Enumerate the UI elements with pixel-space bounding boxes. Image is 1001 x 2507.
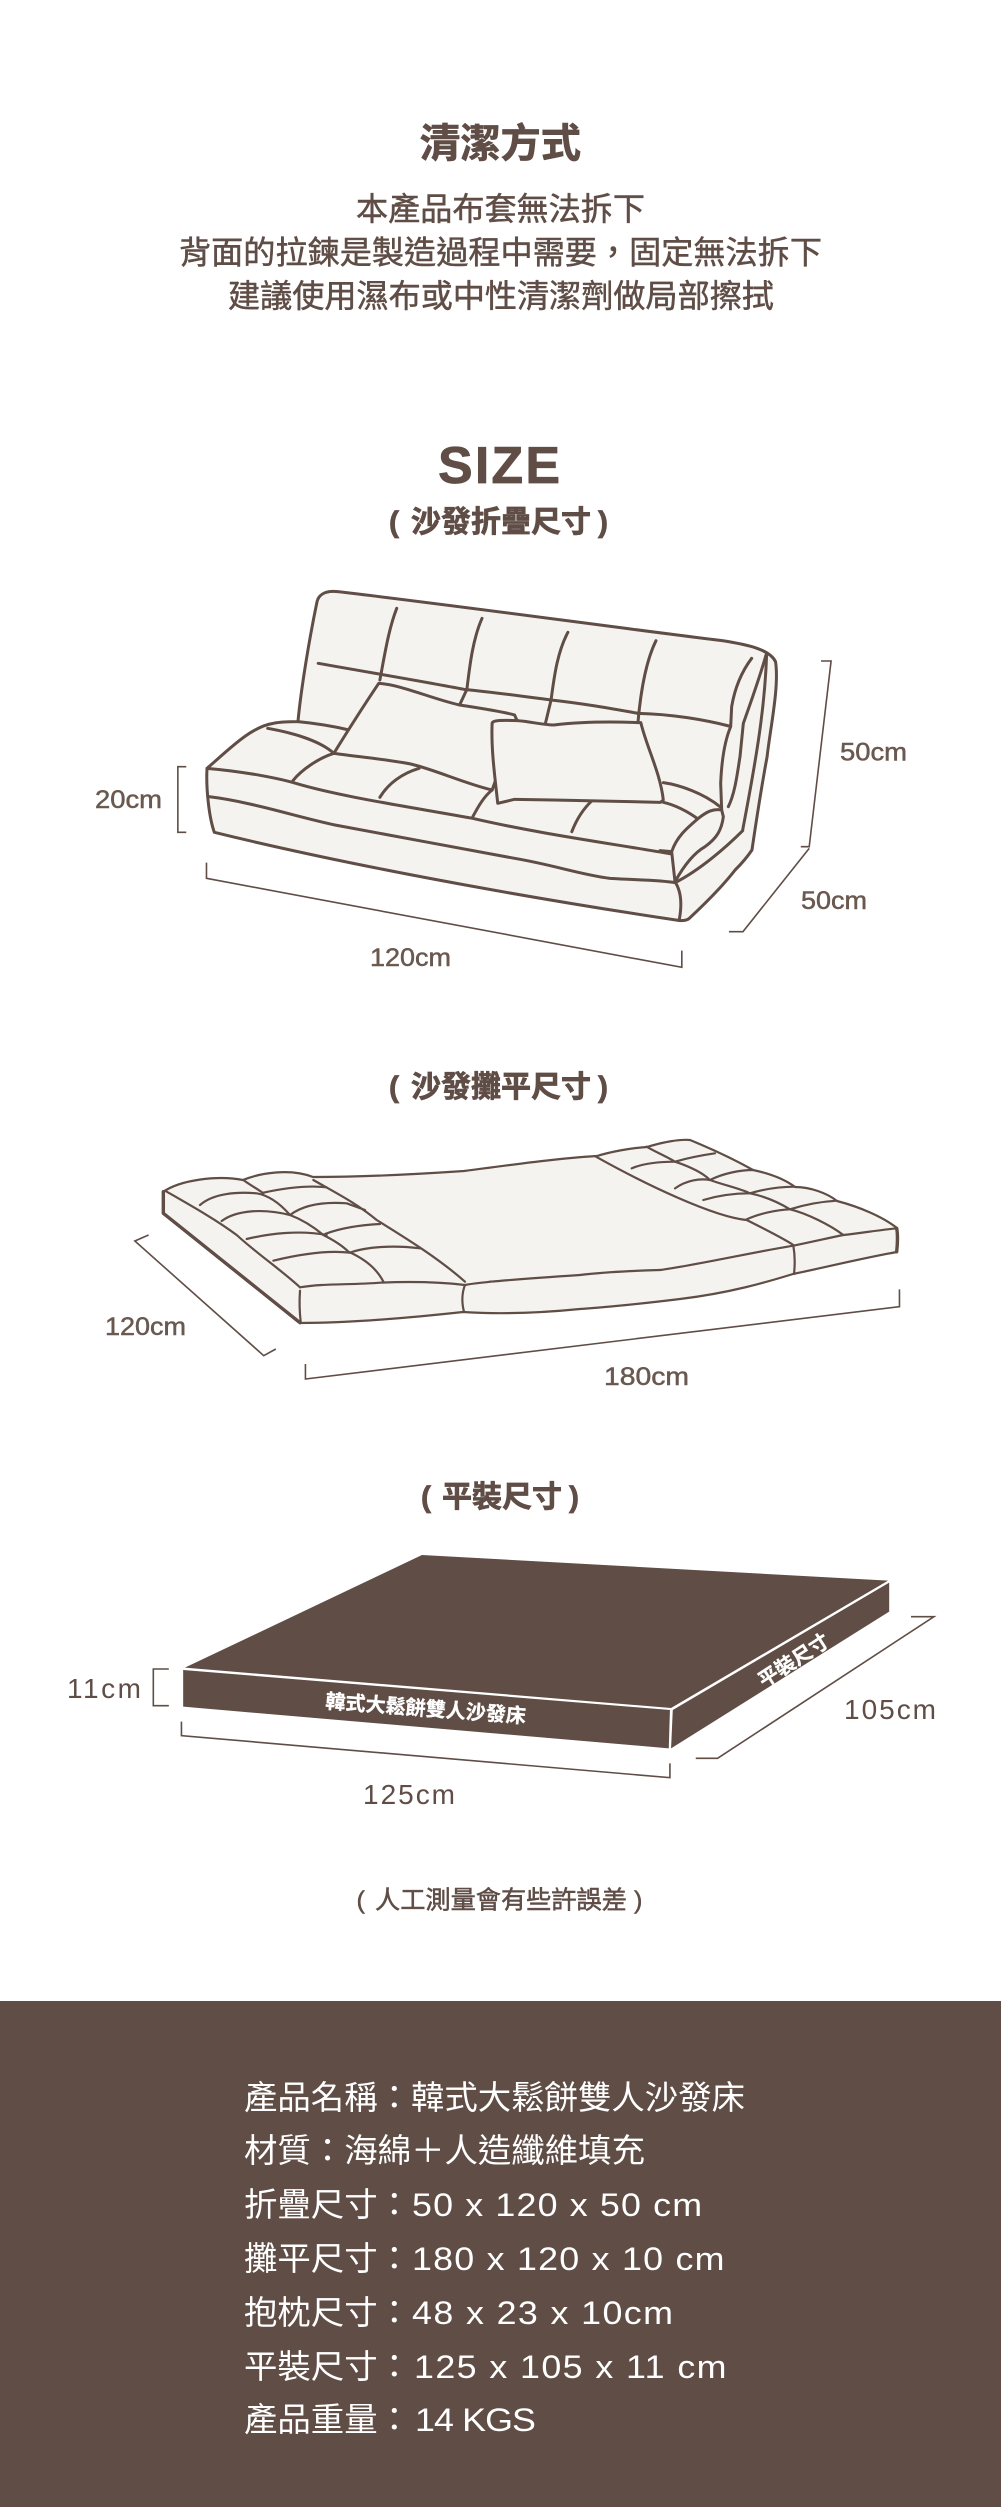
spec: pillow size [244,2286,673,2334]
subheading: folded sofa size: 沙發折疊尺寸 [411,497,591,541]
text block: cleaning instructions: 背面的拉鍊是製造過程中需要，固定無法拆下 [179,228,822,274]
note: manual measurement tolerance: ( [356,1886,366,1914]
subheading: flat sofa size: ) [598,1071,608,1104]
spec: weight [244,2393,536,2441]
spec: folded size: 折疊尺寸： [244,2178,411,2226]
diagram: folded sofa with dimensions [95,591,907,972]
icon: back pillow [334,683,517,790]
spec: packed size [244,2340,726,2388]
sofa right side detail [660,653,767,919]
subheading: flat sofa size: 沙發攤平尺寸 [411,1062,591,1106]
label: 50cm depth: 50cm [801,887,867,915]
subheading: flat sofa size: ( [389,1071,399,1104]
subheading: packed size: 平裝尺寸 [442,1472,562,1516]
label: 120cm depth: 120cm [105,1313,186,1341]
spec: flat size: 180 x 120 x 10 cm [412,2242,724,2278]
heading: SIZE: SIZE [438,437,560,495]
illustration: flat sofa [163,1140,898,1323]
spec: packed size: 平裝尺寸： [244,2340,411,2388]
spec: packed size: 125 x 105 x 11 cm [414,2350,726,2386]
diagram: packed box with dimensions [67,1555,936,1810]
label: 11cm height: 11cm [67,1673,141,1704]
illustration: packed box [183,1555,889,1748]
label: 125cm width: 125cm [363,1779,455,1810]
label: 20cm height: 20cm [95,786,162,814]
subheading: packed size: ( [421,1481,431,1514]
subheading: packed size: ) [569,1481,579,1514]
section: cleaning method [179,111,822,317]
flat sofa middle seam [490,1275,580,1282]
spec: weight: 14 KGS [415,2403,536,2439]
spec: product name: 產品名稱：韓式大鬆餅雙人沙發床 [244,2071,745,2119]
flat sofa left cushion tufting [163,1180,490,1323]
panel: product specifications [0,2001,1001,2507]
diagram: flat sofa with dimensions [105,1140,899,1391]
icon: front pillow [492,720,663,803]
label: 120cm width: 120cm [370,944,451,972]
dimension lines: packed box [153,1617,934,1778]
text block: cleaning instructions: 本產品布套無法拆下 [356,184,645,230]
label: 50cm back height: 50cm [840,738,907,766]
spec: weight: 產品重量： [244,2393,411,2441]
label: 180cm length: 180cm [604,1363,689,1391]
spec: folded size [244,2178,702,2226]
box side label: 平裝尺寸 [751,1625,834,1693]
dimension lines: folded sofa [178,661,831,967]
box side face [671,1583,889,1748]
dimension lines: flat sofa [135,1235,899,1379]
spec: material: 材質：海綿＋人造纖維填充 [244,2124,645,2172]
spec: pillow size: 抱枕尺寸： [244,2286,411,2334]
subheading: folded sofa size: ( [389,506,399,539]
box front face [183,1670,670,1748]
subheading: folded sofa size: ) [598,506,608,539]
note: manual measurement tolerance: 人工測量會有些許誤差 [375,1880,627,1916]
spec: pillow size: 48 x 23 x 10cm [412,2296,673,2332]
note: manual measurement tolerance: ) [634,1886,642,1914]
box front label: 韓式大鬆餅雙人沙發床 [325,1685,527,1729]
box top face [185,1555,888,1708]
spec: flat size: 攤平尺寸： [244,2232,411,2280]
spec: flat size [244,2232,724,2280]
label: 105cm depth: 105cm [844,1694,936,1725]
heading: cleaning method: 清潔方式 [420,111,581,169]
text block: cleaning instructions: 建議使用濕布或中性清潔劑做局部擦拭 [228,271,774,317]
flat sofa right cushion tufting [580,1147,898,1275]
illustration: folded sofa [207,591,776,921]
text block: cleaning instructions [179,184,822,317]
spec: folded size: 50 x 120 x 50 cm [412,2188,702,2224]
